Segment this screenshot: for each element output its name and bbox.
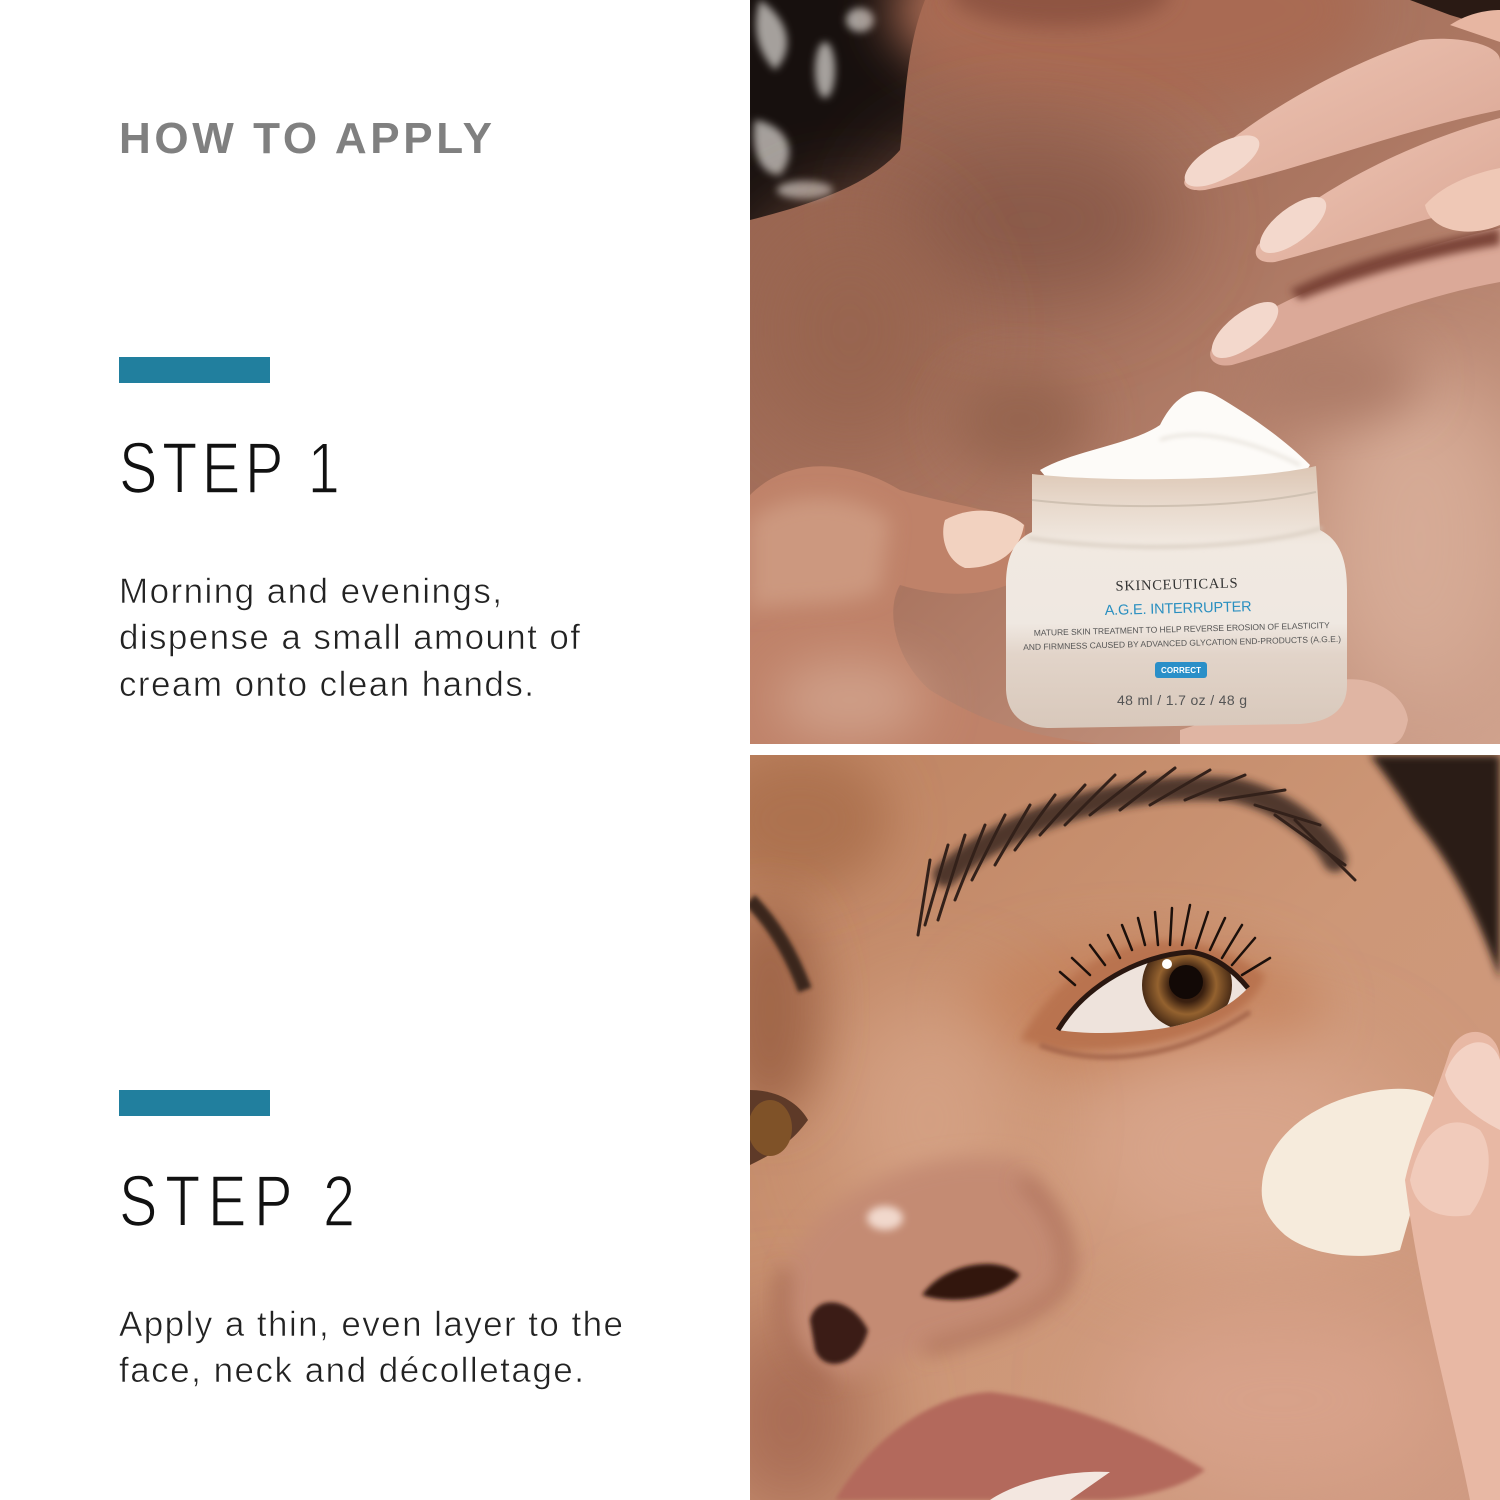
photo: hand holding cream jar [750,0,1500,744]
correct badge: CORRECT [1161,666,1201,675]
fingers on cheek [1405,1032,1500,1500]
hair [750,0,1500,220]
step 1 body text: Morning and evenings, [119,572,502,611]
jar label: MATURE SKIN TREATMENT TO HELP REVERSE EROSION OF ELASTICITY [1034,620,1330,638]
hair [1370,755,1500,980]
jar label: A.G.E. INTERRUPTER [1105,599,1252,619]
fingernails [1184,135,1260,187]
step 2 accent bar [119,1090,270,1116]
eyebrow [918,768,1355,935]
step 2 body text: Apply a thin, even layer to the [119,1305,623,1344]
thumb and holding hand [750,466,1408,744]
lips [835,1392,1205,1500]
second eye [748,900,808,1165]
step 1 body text [119,572,580,704]
jar size: 48 ml / 1.7 oz / 48 g [1117,692,1247,708]
panel: step 1 [119,357,580,704]
skin shading [710,750,1450,1500]
step 1 body text: cream onto clean hands. [119,665,534,704]
jar label: AND FIRMNESS CAUSED BY ADVANCED GLYCATION END-PRODUCTS (A.G.E.) [1023,634,1341,652]
jar label: SKINCEUTICALS [1115,575,1238,595]
step 2 body text: face, neck and décolletage. [119,1351,584,1390]
step 2 heading: STEP 2 [119,1161,355,1241]
cream dab [1262,1089,1440,1256]
step 1 accent bar [119,357,270,383]
panel: step 2 [119,1090,623,1390]
photo: applying cream to the face [710,750,1500,1500]
jar label [1021,573,1341,652]
nose [781,1157,1071,1382]
step 2 body text [119,1305,623,1390]
eye [1020,905,1270,1057]
step 1 body text: dispense a small amount of [119,618,580,657]
correct badge [1155,662,1207,678]
jar [1006,466,1347,728]
fingers top right [1177,10,1500,368]
cream in jar [1040,391,1310,482]
step 1 heading: STEP 1 [119,428,340,508]
chin and neck shading [750,0,1500,710]
heading: how to apply: HOW TO APPLY [119,114,492,163]
